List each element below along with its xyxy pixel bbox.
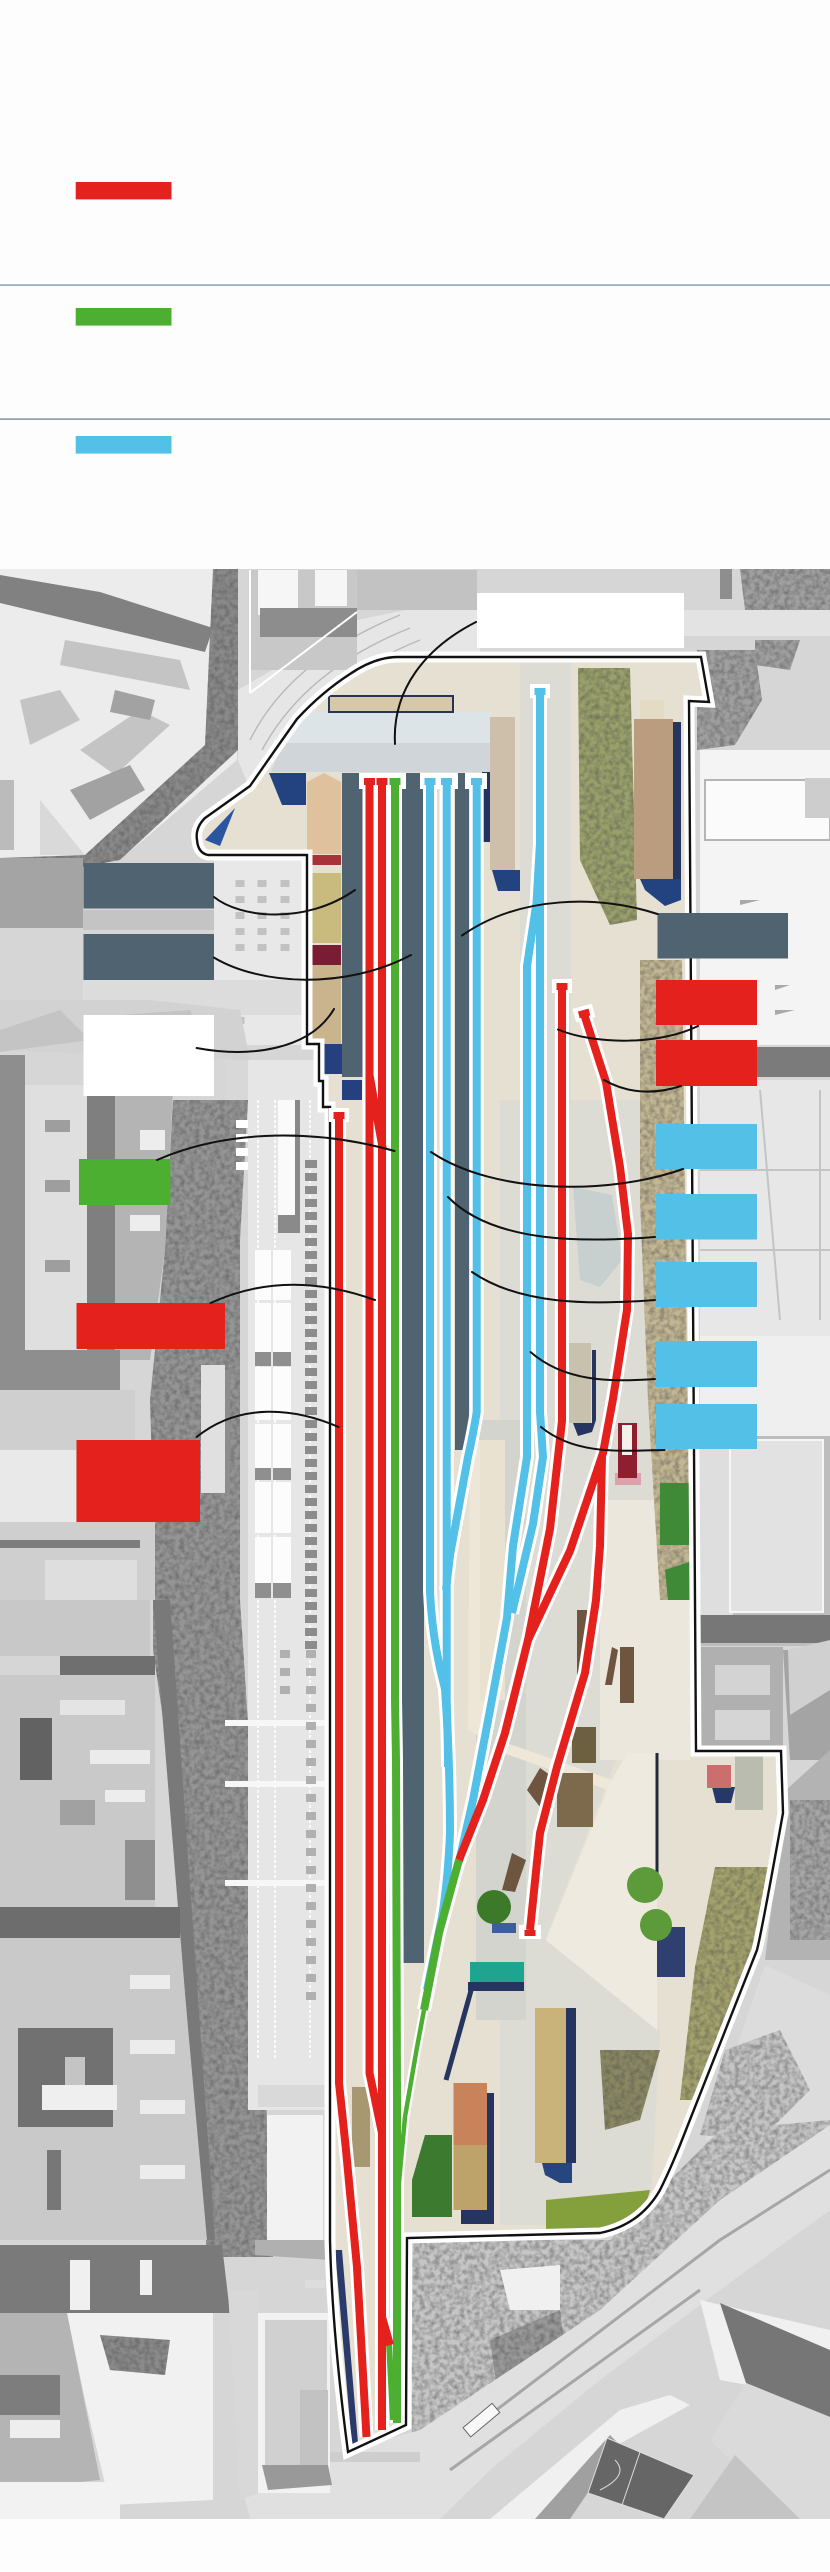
navy trench along west edge [335,2250,358,2446]
label box: green left [79,1159,170,1205]
station shed roof [274,712,492,763]
sports courts right [700,1080,830,1336]
long tan warehouse [634,719,673,879]
legend swatch: green [76,308,172,326]
buildings left of platform [307,773,341,854]
stacks of sleepers [352,1610,634,2167]
gravel with blue stain [573,1187,622,1287]
asphalt patches [500,660,670,2225]
label box: blue right 2 [656,1194,757,1240]
plaza with tram tracks [238,595,480,790]
label box: top white [477,593,684,648]
label box: red left 2 [76,1440,200,1522]
building right of shed [490,717,515,870]
legend swatch: blue [76,436,172,454]
cars and trees west of the avenue [97,1090,173,1360]
shadow under station wing [324,1044,342,1074]
yellow roof shed [535,2008,576,2183]
label box: slate right [658,913,788,958]
small building and shadow [569,1343,591,1423]
label box: red right 2 [656,1040,757,1086]
legend divider 1 [0,284,830,286]
trees in plaza with shadows [627,1753,685,1977]
vegetation strips [578,668,637,925]
label box: white left [84,1015,214,1096]
rows of parked cars [305,1160,317,1650]
upper left building details [20,640,190,775]
red track lines [339,783,628,2437]
legend swatch: red [76,182,172,199]
left middle rows [0,858,83,928]
pink roof hut [707,1755,763,1810]
trees along the avenue [150,1100,273,2257]
upper left streets [0,575,213,652]
orange roof building [454,2083,494,2224]
parking area [248,1060,330,2110]
upper side of lower avenue [410,2120,830,2460]
leader lines [157,622,698,1451]
street beside the trees [153,1600,215,2240]
empty lot lower left [67,2313,213,2505]
city blocks lower left [0,1350,120,1390]
railway site in colour, clipped to boundary [190,650,790,2460]
line end caps [334,688,590,1936]
warehouse lower right [700,1436,830,1646]
green track lines [389,783,459,2423]
legend [0,182,830,454]
parking shelters [278,1100,295,1233]
pale concrete plaza [546,1753,657,2030]
red-and-white wagon [615,1423,641,1485]
label boxes [76,593,788,1522]
lower road and building beside site [228,2290,268,2500]
label box: slate left 1 [84,863,214,908]
upper right trees and road [697,650,762,750]
trees and shadow near teal shed [477,1890,511,1924]
label box: blue right 1 [656,1124,757,1169]
blue track lines [427,692,543,1990]
label box: slate left 2 [84,934,214,980]
trees beside orange building [412,2135,452,2217]
aerial photo context in greyscale [0,569,830,2519]
upper left blocks [0,569,237,860]
lower avenue [240,2125,830,2519]
block between warehouse and site [700,1647,783,1748]
large white warehouse [700,750,830,1045]
shadows near shed [269,773,306,805]
label box: red left 1 [76,1303,225,1349]
small building with navy outline [329,696,453,712]
legend divider 2 [0,418,830,420]
label box: blue right 4 [656,1341,757,1387]
sports field [588,2438,694,2519]
teal roof shed [470,1962,524,1982]
label box: blue right 5 [656,1404,757,1449]
track lines: white casing [339,692,628,2437]
label box: blue right 3 [656,1262,757,1307]
label box: red right 1 [656,980,757,1025]
platform: long slate bands [342,773,469,1963]
cap casings at line ends [329,684,595,1939]
building above plaza [250,570,357,670]
parked cars upper lot [240,880,285,1030]
buildings below the avenue [700,2300,830,2400]
road right [757,1047,830,1077]
site boundary line [197,657,783,2452]
